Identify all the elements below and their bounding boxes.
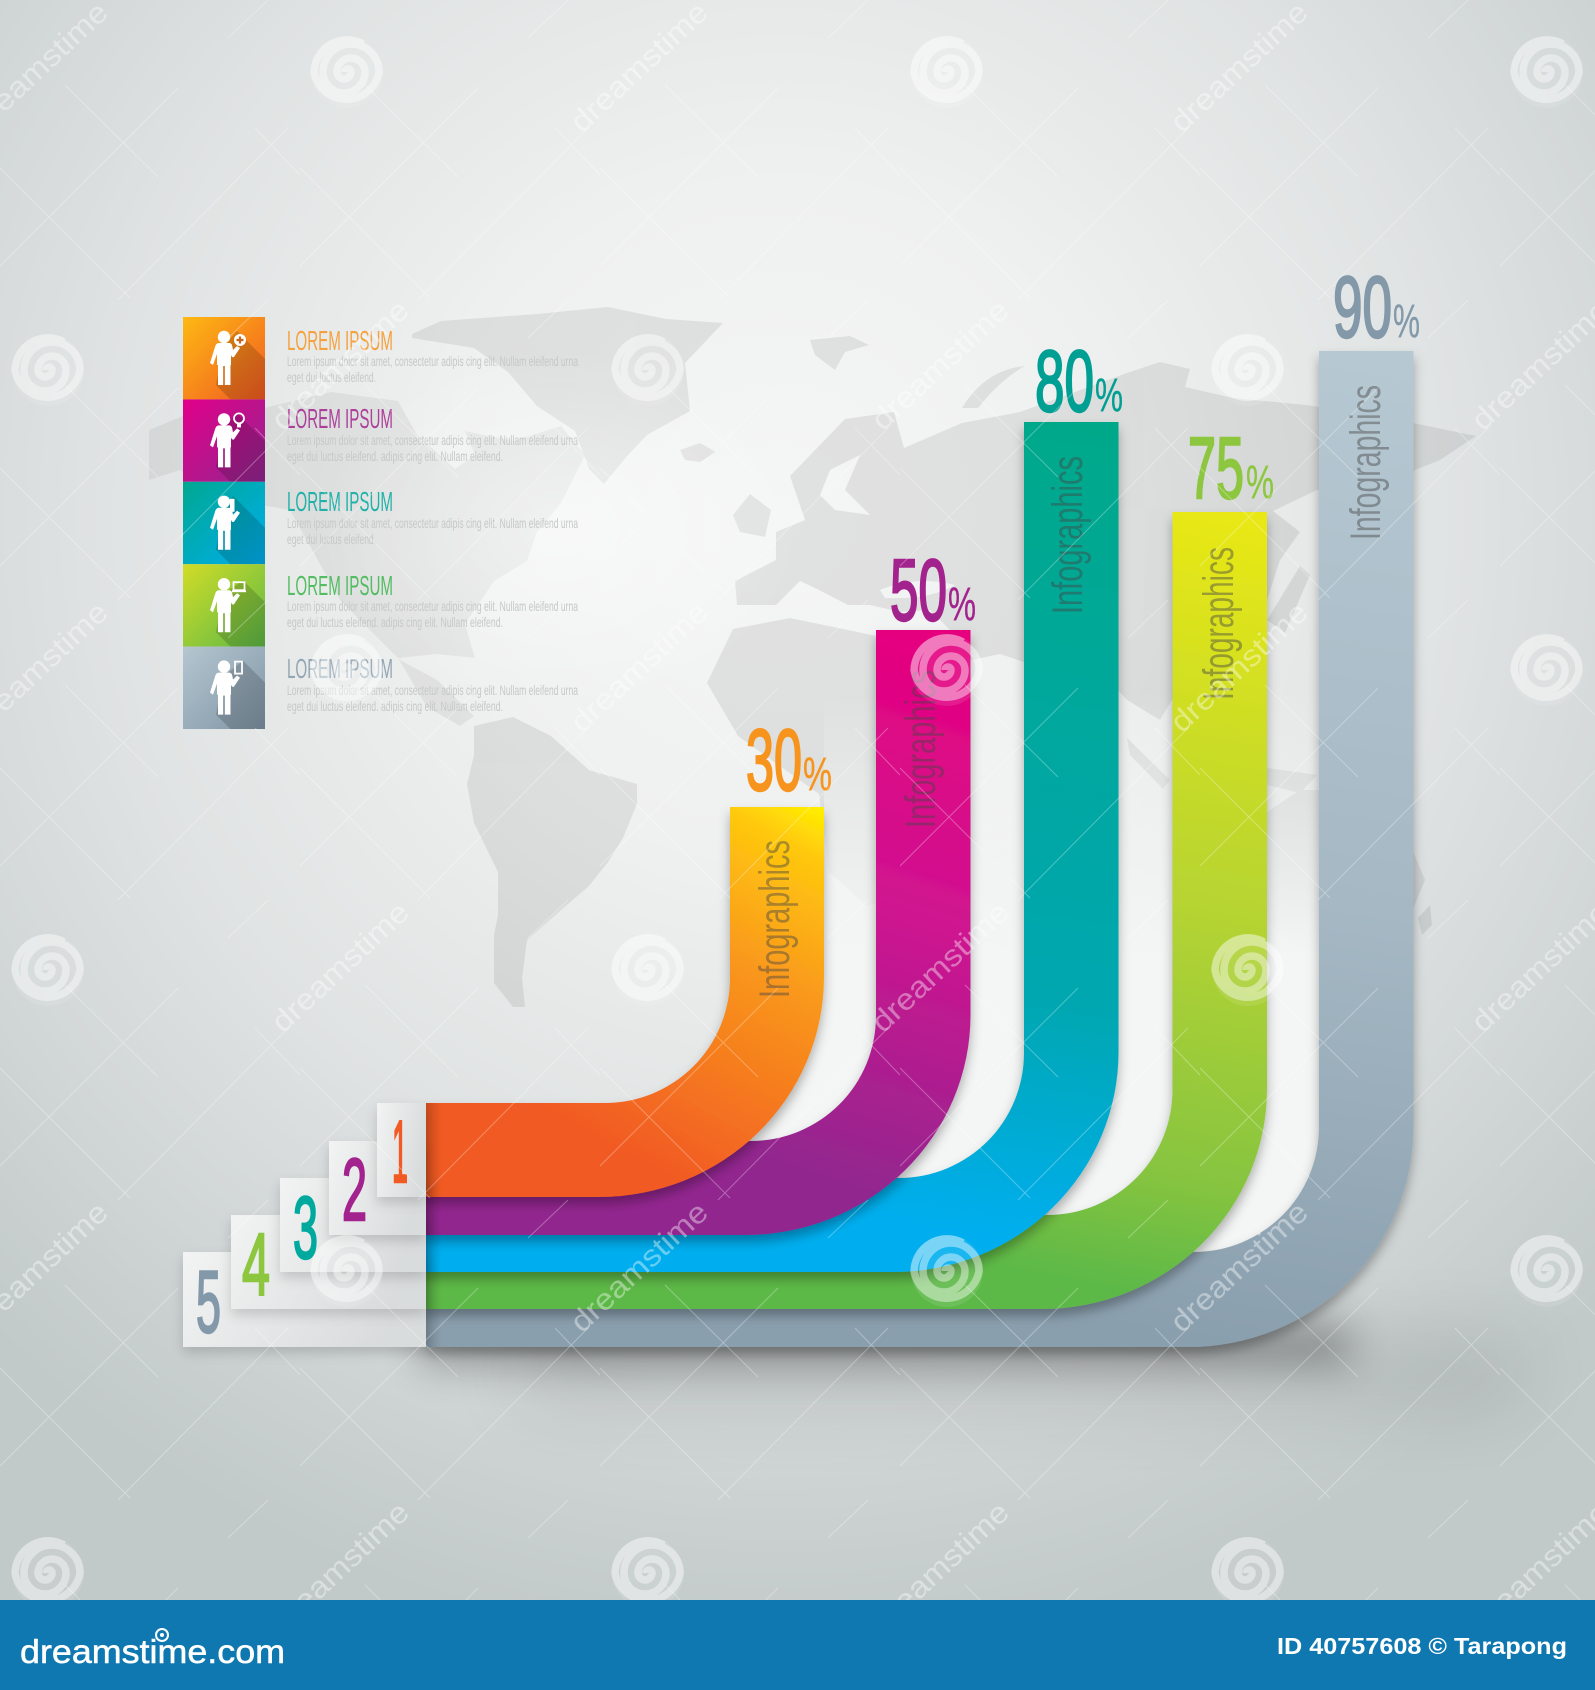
- percent label 50: 50: [890, 542, 947, 639]
- percent label 80: %: [1095, 368, 1123, 421]
- legend row 3: LOREM IPSUM: [287, 486, 393, 517]
- legend row 1: LOREM IPSUM: [287, 325, 393, 356]
- card 2: [329, 1140, 426, 1239]
- watermark overlay: dreamstime: [265, 1496, 416, 1639]
- card 4: [231, 1215, 426, 1314]
- watermark overlay: dreamstime: [265, 294, 416, 437]
- watermark overlay: dreamstime: [564, 1196, 715, 1339]
- legend row 3: Lorem ipsum dolor sit amet, consectetur adipis cing elit. Nullam eleifend urna: [287, 515, 578, 531]
- bar 3: 80% blue teal: [426, 422, 1118, 1272]
- percent label 90: %: [1393, 294, 1420, 347]
- bar 2: 50% purple magenta: [426, 630, 970, 1235]
- icon: person with phone: [183, 482, 265, 564]
- step cards: [183, 1102, 426, 1351]
- watermark overlay: dreamstime: [865, 294, 1016, 437]
- world map: [149, 307, 1476, 1007]
- watermark overlay: dreamstime: [564, 596, 715, 739]
- percent label 30: 30: [746, 712, 802, 809]
- bar captions: Infographics: [1044, 456, 1092, 614]
- legend row 2: LOREM IPSUM: [287, 403, 393, 434]
- legend row 1: [183, 317, 578, 407]
- legend row 4: [183, 564, 578, 654]
- footer credit: ID 40757608 © Tarapong: [1277, 1633, 1567, 1659]
- icon: person with laptop: [183, 564, 265, 647]
- watermark overlay: dreamstime: [1164, 0, 1315, 139]
- legend: [183, 317, 578, 737]
- card 3: [280, 1178, 426, 1277]
- card 5: 5: [196, 1252, 221, 1351]
- icon: person with tablet: [183, 646, 265, 729]
- legend row 4: eget dui luctus eleifend. adipis cing elit. Nullam eleifend.: [287, 614, 503, 630]
- legend row 2: eget dui luctus eleifend. adipis cing elit. Nullam eleifend.: [287, 448, 503, 464]
- legend row 1: eget dui luctus eleifend.: [287, 369, 376, 385]
- percent label 75: %: [1246, 455, 1274, 508]
- legend row 2: [183, 399, 578, 489]
- percent label 30: %: [803, 747, 832, 800]
- legend row 5: [183, 647, 578, 737]
- footer bar: [0, 1600, 1595, 1690]
- footer logo: dreamstime.com: [20, 1633, 285, 1670]
- bar captions: [751, 385, 1390, 998]
- chart: curved bars: [426, 351, 1414, 1347]
- card 2: 2: [342, 1140, 367, 1239]
- percent label 90: 90: [1333, 259, 1392, 356]
- card 4: 4: [242, 1215, 270, 1314]
- centre glow: [320, 350, 800, 710]
- card 5: [183, 1252, 426, 1351]
- watermark overlay: dreamstime: [865, 896, 1016, 1039]
- bar start edge shading: [426, 1103, 442, 1347]
- bar captions: Infographics: [1342, 385, 1390, 540]
- bar 5: 90% grey: [426, 351, 1414, 1347]
- watermark overlay: dreamstime: [564, 0, 715, 139]
- percent label 80: 80: [1035, 333, 1094, 430]
- icon: person with light bulb: [183, 399, 265, 482]
- watermark overlay: dreamstime: [265, 896, 416, 1039]
- icon: person with plus badge: [183, 317, 265, 400]
- legend row 4: LOREM IPSUM: [287, 570, 393, 601]
- card 1: [377, 1102, 426, 1201]
- legend row 5: eget dui luctus eleifend. adipis cing elit. Nullam eleifend.: [287, 698, 503, 714]
- watermark overlay: dreamstime: [865, 1496, 1016, 1639]
- legend row 5: LOREM IPSUM: [287, 653, 393, 684]
- percent label 75: 75: [1188, 420, 1244, 517]
- legend row 3: eget dui luctus eleifend.: [287, 531, 376, 547]
- bar 1: 30% orange yellow: [426, 807, 824, 1197]
- watermark overlay: dreamstime: [1164, 1196, 1315, 1339]
- watermark overlay: dreamstime: [1164, 596, 1315, 739]
- bar 4: 75% green: [426, 512, 1267, 1309]
- legend row 4: Lorem ipsum dolor sit amet, consectetur adipis cing elit. Nullam eleifend urna: [287, 598, 578, 614]
- bar captions: Infographics: [897, 670, 945, 828]
- percent label 50: %: [948, 577, 976, 630]
- legend row 1: Lorem ipsum dolor sit amet, consectetur adipis cing elit. Nullam eleifend urna: [287, 353, 578, 369]
- bar captions: Infographics: [1195, 547, 1243, 700]
- legend row 5: Lorem ipsum dolor sit amet, consectetur adipis cing elit. Nullam eleifend urna: [287, 682, 578, 698]
- bar captions: Infographics: [751, 840, 799, 998]
- legend row 2: Lorem ipsum dolor sit amet, consectetur adipis cing elit. Nullam eleifend urna: [287, 432, 578, 448]
- legend row 3: [183, 482, 578, 572]
- ground shadow: [420, 1325, 1520, 1400]
- card 1: 1: [392, 1102, 408, 1201]
- card 3: 3: [293, 1178, 318, 1277]
